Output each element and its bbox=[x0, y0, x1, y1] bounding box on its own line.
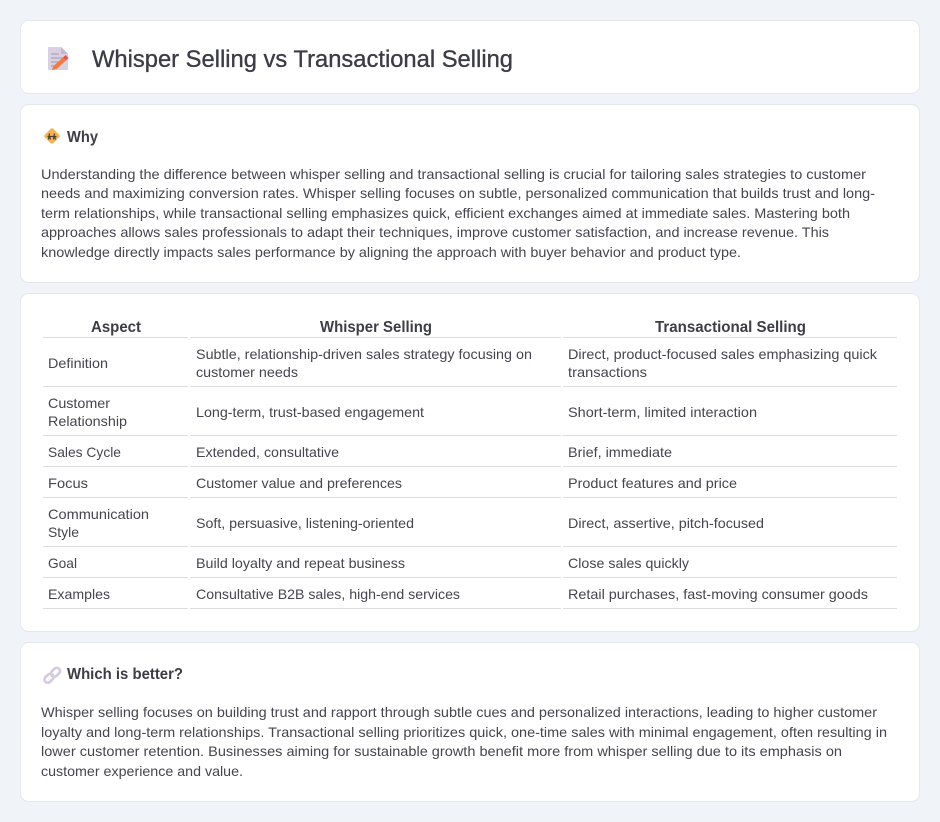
text block: why paragraph: Understanding the difference between whisper selling and transactional selling is crucial for tailoring sales strategies to customer bbox=[41, 166, 866, 182]
row: definition: Definition bbox=[48, 355, 108, 371]
row: examples: Retail purchases, fast-moving consumer goods bbox=[568, 586, 868, 602]
row: goal: Goal bbox=[48, 555, 77, 571]
panel: title header bbox=[20, 20, 920, 94]
row: customer relationship: Long-term, trust-based engagement bbox=[196, 404, 424, 420]
text block: why paragraph: term relationships, while transactional selling emphasizes quick, efficient exchanges aimed at immediate sales. Mastering both bbox=[41, 205, 850, 221]
row: definition bbox=[48, 346, 878, 380]
icon: chain link bbox=[43, 666, 61, 684]
text block: which is better paragraph: loyalty and long-term relationships. Transactional selling prioritizes quick, one-time sales with minimal engagement, often resulting in bbox=[41, 724, 887, 740]
title: Whisper Selling vs Transactional Selling bbox=[92, 46, 513, 73]
row: customer relationship bbox=[48, 395, 757, 429]
row: communication style bbox=[48, 506, 764, 540]
text block: why paragraph: needs and maximizing conversion rates. Whisper selling focuses on subtle, personalized communication that builds trust and long- bbox=[41, 185, 875, 201]
text block: which is better paragraph: lower customer retention. Businesses aiming for sustainable growth benefit more from whisper selling due to its emphasis on bbox=[41, 743, 842, 759]
row: sales cycle: Brief, immediate bbox=[568, 444, 672, 460]
row: sales cycle bbox=[48, 444, 672, 460]
row: definition: transactions bbox=[568, 364, 647, 380]
row: focus: Customer value and preferences bbox=[196, 475, 402, 491]
text block: why paragraph bbox=[41, 166, 875, 260]
table header row: Whisper Selling bbox=[320, 319, 432, 336]
row: sales cycle: Sales Cycle bbox=[48, 444, 121, 460]
row: focus: Product features and price bbox=[568, 475, 737, 491]
icon: warning diamond bbox=[44, 128, 60, 144]
row: communication style: Direct, assertive, pitch-focused bbox=[568, 515, 764, 531]
row: sales cycle: Extended, consultative bbox=[196, 444, 339, 460]
table header row: Transactional Selling bbox=[655, 319, 806, 336]
row: examples: Consultative B2B sales, high-end services bbox=[196, 586, 460, 602]
heading: which is better: Which is better? bbox=[67, 666, 183, 683]
row: goal bbox=[48, 555, 689, 571]
text block: which is better paragraph bbox=[41, 704, 887, 779]
table header row: Aspect bbox=[91, 319, 142, 336]
row: communication style: Style bbox=[48, 524, 79, 540]
text block: which is better paragraph: customer experience and value. bbox=[41, 763, 243, 779]
row: definition: Subtle, relationship-driven sales strategy focusing on bbox=[196, 346, 532, 362]
row: focus bbox=[48, 475, 737, 491]
row: customer relationship: Short-term, limited interaction bbox=[568, 404, 757, 420]
heading: why: Why bbox=[67, 129, 98, 146]
table header row bbox=[91, 319, 806, 336]
row: definition: Direct, product-focused sales emphasizing quick bbox=[568, 346, 878, 362]
text block: why paragraph: knowledge directly impacts sales performance by aligning the approach with buyer behavior and product type. bbox=[41, 244, 741, 260]
panel: which is better bbox=[20, 642, 920, 802]
row: customer relationship: Relationship bbox=[48, 413, 127, 429]
panel: comparison table bbox=[20, 294, 920, 632]
row: focus: Focus bbox=[48, 475, 88, 491]
row: examples bbox=[48, 586, 868, 602]
text block: which is better paragraph: Whisper selling focuses on building trust and rapport through subtle cues and personalized interactions, leading to higher customer bbox=[41, 704, 877, 720]
icon: memo with pencil bbox=[48, 47, 68, 70]
row: goal: Build loyalty and repeat business bbox=[196, 555, 405, 571]
row: examples: Examples bbox=[48, 586, 110, 602]
row: customer relationship: Customer bbox=[48, 395, 110, 411]
row: communication style: Soft, persuasive, listening-oriented bbox=[196, 515, 414, 531]
row: definition: customer needs bbox=[196, 364, 298, 380]
row: communication style: Communication bbox=[48, 506, 149, 522]
row: goal: Close sales quickly bbox=[568, 555, 689, 571]
text block: why paragraph: approaches allows sales professionals to adapt their techniques, improve customer satisfaction, and increase revenue. This bbox=[41, 224, 829, 240]
panel: why bbox=[20, 104, 920, 282]
